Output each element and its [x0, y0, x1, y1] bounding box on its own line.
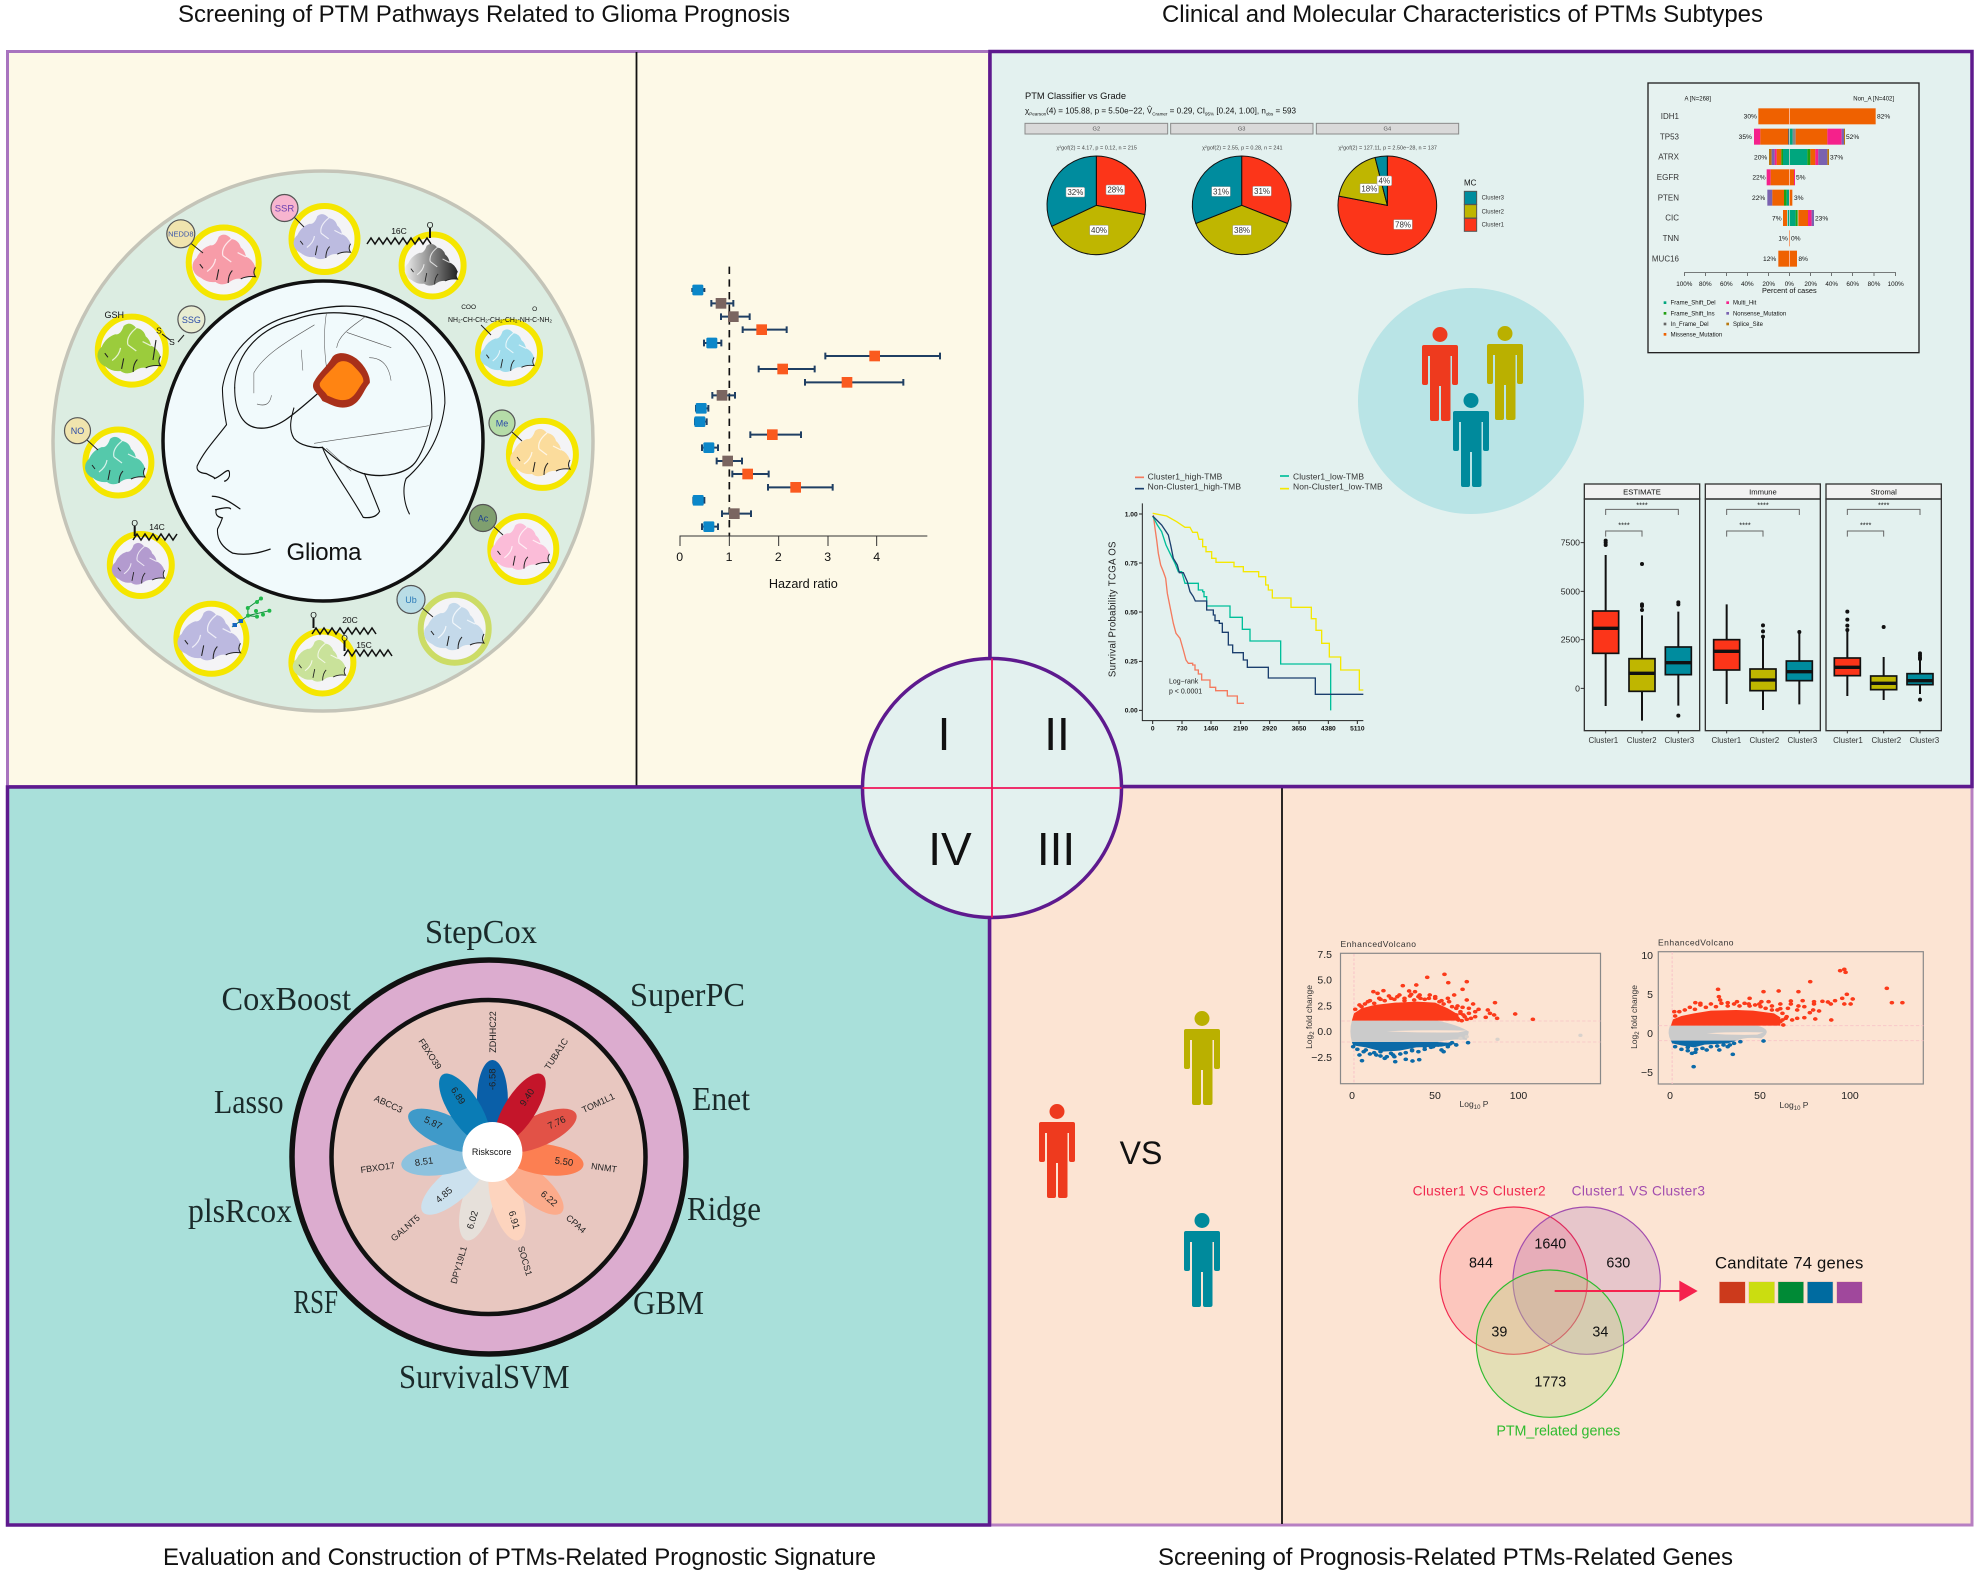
volcano plot: Cluster1 vs Cluster2: [1304, 939, 1601, 1111]
volcano plot: Cluster1 vs Cluster3: fold change: [1629, 985, 1639, 1031]
gene labels: MUC16: [1652, 254, 1680, 263]
facet: Stromal: Cluster2: [1871, 736, 1902, 745]
petal chart: risk score genes: 4.85: [434, 1185, 455, 1206]
panel IV: prognostic signature background: [8, 787, 990, 1525]
protein: methylation: Me: [496, 418, 508, 428]
percentage labels: 38%: [1234, 226, 1250, 235]
percent axis: Percent of cases: [1762, 286, 1817, 295]
oncoplot: mutation frequency comparison: [1648, 83, 1919, 353]
facet: Stromal: ****: [1878, 500, 1890, 509]
percentage values: 0%: [1791, 236, 1801, 243]
volcano plot: Cluster1 vs Cluster3: 10: [1641, 950, 1653, 962]
arrow to candidate genes: [1555, 1281, 1698, 1302]
algorithm labels: plsRcox: [188, 1193, 292, 1230]
outer ring disc: [53, 171, 593, 711]
legend: [1135, 472, 1383, 492]
survival curves: TCGA OS: 0.00: [1125, 708, 1138, 715]
facet: ESTIMATE: [1584, 484, 1700, 745]
volcano plot: Cluster1 vs Cluster3: −5: [1641, 1067, 1653, 1079]
mutation legend: Splice_Site: [1733, 322, 1764, 328]
volcano plot: Cluster1 vs Cluster2: 0: [1349, 1090, 1355, 1102]
protein: SSR: [271, 194, 358, 272]
facet: Immune: Cluster2: [1749, 736, 1780, 745]
petal chart: risk score genes: Riskscore: [472, 1147, 511, 1157]
pie charts: classifier vs grade: G3: [1238, 127, 1245, 133]
center circle: section numerals: [862, 658, 1122, 918]
volcano plot: Cluster1 vs Cluster2: 50: [1429, 1090, 1441, 1102]
protein: myristoylation 14C: O: [131, 518, 138, 528]
protein: palmitoylation 16C: [367, 220, 464, 296]
gene labels: CIC: [1665, 214, 1679, 223]
survival curves: TCGA OS: 0.75: [1125, 560, 1138, 567]
volcano plot: Cluster1 vs Cluster2: 10: [1474, 1105, 1481, 1111]
statistics line: obs: [1266, 111, 1274, 116]
inner disc: [332, 1000, 646, 1314]
facet: Immune: [1705, 484, 1820, 745]
survival curves: TCGA OS: 0.50: [1125, 609, 1138, 616]
protein: palmitoylation 16C: 16C: [391, 226, 407, 236]
venn diagram: candidate genes: Cluster1 VS Cluster3: [1572, 1184, 1705, 1199]
center circle: section numerals: III: [1037, 823, 1075, 875]
facet: Stromal: Cluster3: [1909, 736, 1940, 745]
panel I: PTM pathways background: [8, 52, 990, 786]
protein: nitrosylation: [64, 418, 151, 496]
protein: myristoylation 14C: 14C: [149, 522, 165, 532]
y axis: 2500: [1561, 635, 1580, 645]
algorithm labels: Ridge: [687, 1191, 761, 1228]
ring: algorithm band: [292, 960, 686, 1354]
legend: Cluster1_high-TMB: [1148, 472, 1223, 482]
percentage labels: 31%: [1254, 187, 1270, 196]
survival curves: TCGA OS: 730: [1176, 726, 1188, 733]
petal chart: risk score genes: 6.91: [506, 1210, 521, 1231]
gene labels: [1652, 112, 1680, 263]
volcano plot: Cluster1 vs Cluster2: EnhancedVolcano: [1340, 939, 1417, 949]
facet: Immune: Immune: [1749, 487, 1777, 496]
venn diagram: candidate genes: 1773: [1534, 1375, 1566, 1391]
title: panel I: Screening of PTM Pathways Related to Glioma Prognosis: [178, 1, 790, 28]
survival curves: TCGA OS: 5110: [1350, 726, 1365, 733]
center circle: head and brain: [163, 281, 483, 601]
reference line at HR 1: [727, 267, 732, 536]
statistics line: 95%: [1205, 111, 1214, 116]
protein: methylation: [489, 410, 576, 488]
percentage labels: 28%: [1107, 186, 1123, 195]
percent axis: [1676, 273, 1904, 295]
percent axis: 60%: [1720, 281, 1733, 288]
legend: Non-Cluster1_high-TMB: [1148, 482, 1241, 492]
volcano plot: Cluster1 vs Cluster3: 5: [1647, 989, 1653, 1001]
protein: citrullination: NH₂-CH-CH₂-CH₂-CH₂-NH-C-NH₂: [448, 315, 552, 324]
algorithm labels: SuperPC: [630, 977, 745, 1014]
percentage labels: 18%: [1361, 184, 1377, 193]
statistics line: (4) = 105.88, p = 5.50e−22, V̂: [1046, 105, 1153, 115]
gene labels: TP53: [1660, 132, 1680, 141]
volcano plot: Cluster1 vs Cluster3: 0: [1647, 1028, 1653, 1040]
petal chart: risk score genes: FBXO17: [360, 1160, 395, 1175]
gene labels: ATRX: [1658, 153, 1680, 162]
pie charts: classifier vs grade: G4: [1384, 127, 1391, 133]
center circle: section numerals: IV: [928, 823, 972, 875]
protein: acetylation: [470, 504, 556, 582]
protein: lipidation 20C 15C: [291, 610, 392, 694]
protein: citrullination: COO: [461, 304, 476, 311]
mutation legend: Frame_Shift_Del: [1671, 301, 1716, 307]
pie G2: [1047, 156, 1146, 255]
petal chart: risk score genes: 5.50: [554, 1155, 574, 1169]
facet: ESTIMATE: ****: [1636, 500, 1648, 509]
protein: citrullination: [448, 304, 552, 384]
protein: NEDD8: [167, 220, 259, 298]
gene labels: PTEN: [1658, 193, 1679, 202]
percentage values: 22%: [1752, 195, 1765, 202]
protein: glutathionylation: SSG: [182, 315, 201, 325]
petal chart: risk score genes: GALNT5: [389, 1213, 422, 1243]
algorithm labels: GBM: [633, 1285, 704, 1322]
protein: citrullination: O: [532, 306, 537, 313]
gene labels: IDH1: [1661, 112, 1680, 121]
mutation legend: [1664, 301, 1786, 338]
percentage labels: 32%: [1067, 188, 1083, 197]
forest plot: hazard ratios: 1: [726, 550, 733, 564]
heading: PTM Classifier vs Grade: [1025, 91, 1126, 101]
percentage values: 7%: [1772, 215, 1782, 222]
venn diagram: candidate genes: 39: [1491, 1324, 1507, 1340]
petal chart: risk score genes: NNMT: [590, 1161, 618, 1175]
percent axis: 80%: [1868, 281, 1881, 288]
y axis: 0: [1575, 683, 1580, 693]
percentage values: 5%: [1796, 175, 1806, 182]
y axis: 5000: [1561, 586, 1580, 596]
algorithm labels: [188, 914, 761, 1396]
facet: ESTIMATE: Cluster3: [1664, 736, 1695, 745]
petal chart: risk score genes: 9.40: [518, 1087, 537, 1108]
protein: glycosylation: [176, 596, 271, 674]
pie G4: [1338, 156, 1437, 255]
panel III: gene screening background: [990, 787, 1972, 1525]
algorithm labels: RSF: [294, 1284, 338, 1321]
petal chart: risk score genes: ZDHHC22: [488, 1011, 498, 1053]
box plots: ESTIMATE Immune Stromal: [1561, 484, 1941, 745]
panel II: subtype characteristics background: [990, 52, 1972, 786]
percentage values: 35%: [1739, 134, 1752, 141]
petal chart: risk score genes: SOCS1: [516, 1245, 534, 1277]
mutation legend: In_Frame_Del: [1671, 322, 1709, 328]
percent axis: 100%: [1676, 281, 1693, 288]
percent axis: 0%: [1785, 281, 1794, 288]
algorithm labels: SurvivalSVM: [399, 1359, 570, 1396]
legend: MC: Cluster2: [1482, 209, 1505, 215]
percent axis: 40%: [1741, 281, 1754, 288]
icon: red vs olive and teal patients: VS: [1120, 1135, 1162, 1171]
volcano plot: Cluster1 vs Cluster3: 10: [1794, 1106, 1801, 1112]
petal chart: risk score genes: [360, 1011, 618, 1285]
survival curves: TCGA OS: 1460: [1204, 726, 1219, 733]
forest plot: hazard ratios: [676, 267, 940, 591]
protein: glutathionylation: GSH: [105, 310, 124, 320]
percentage labels: 78%: [1395, 220, 1411, 229]
y axis: 7500: [1561, 538, 1580, 548]
petal chart: risk score genes: 6.89: [448, 1085, 467, 1107]
venn diagram: candidate genes: Cluster1 VS Cluster2: [1413, 1184, 1546, 1199]
oncoplot: mutation frequency comparison: A [N=268]: [1684, 97, 1711, 103]
volcano plot: Cluster1 vs Cluster2: 5.0: [1317, 974, 1332, 986]
icon: three patient subtypes on circle: [1358, 288, 1584, 514]
algorithm labels: StepCox: [425, 914, 537, 951]
statistics line: Cramer: [1152, 111, 1168, 116]
petal chart: risk score genes: 6.02: [465, 1210, 481, 1231]
percentage values: 20%: [1754, 154, 1767, 161]
facet: Immune: ****: [1757, 500, 1769, 509]
facet: ESTIMATE: Cluster2: [1627, 736, 1657, 745]
percentage values: 23%: [1815, 215, 1828, 222]
facet: Immune: Cluster1: [1711, 736, 1742, 745]
axis title: Hazard ratio: [769, 577, 838, 591]
venn diagram: candidate genes: 844: [1469, 1256, 1493, 1272]
facet: Stromal: ****: [1860, 520, 1872, 529]
survival curves: TCGA OS: 2920: [1262, 726, 1277, 733]
percentage values: [1739, 114, 1890, 263]
mutation legend: Frame_Shift_Ins: [1671, 311, 1715, 317]
percentage values: 30%: [1744, 114, 1757, 121]
venn diagram: candidate genes: PTM_related genes: [1496, 1424, 1620, 1440]
forest plot: hazard ratios: 0: [676, 550, 683, 564]
forest plot: hazard ratios: 2: [775, 550, 782, 564]
volcano plot: Cluster1 vs Cluster2: 2.5: [1317, 1000, 1332, 1012]
volcano plot: Cluster1 vs Cluster2: 100: [1510, 1090, 1527, 1102]
pie charts: classifier vs grade: χ²gof(2) = 2.55, p = 0.28, n = 241: [1202, 146, 1283, 152]
algorithm labels: CoxBoost: [222, 981, 352, 1018]
center circle: section numerals: II: [1044, 708, 1070, 760]
volcano plot: Cluster1 vs Cluster2: P: [1480, 1099, 1489, 1109]
icon: tumor: [313, 353, 370, 408]
facet: Stromal: [1826, 484, 1941, 745]
facet strips: [1025, 123, 1459, 134]
icon: red vs olive and teal patients: [1039, 1011, 1220, 1307]
gene labels: EGFR: [1657, 173, 1679, 182]
algorithm labels: Lasso: [214, 1084, 284, 1121]
survival lines: [1153, 513, 1363, 710]
facet: ESTIMATE: ESTIMATE: [1623, 487, 1661, 496]
forest plot: hazard ratios: 3: [824, 550, 831, 564]
percent axis: 20%: [1762, 281, 1775, 288]
protein: lipidation 20C 15C: 20C: [342, 615, 358, 625]
axes: [1139, 503, 1363, 724]
volcano plot: Cluster1 vs Cluster2: Log: [1304, 1035, 1314, 1049]
survival curves: TCGA OS: 1.00: [1125, 511, 1138, 518]
statistics line: [0.24, 1.00], n: [1214, 105, 1266, 115]
hazard ratio markers: [692, 285, 717, 532]
venn diagram: candidate genes: 1640: [1534, 1237, 1566, 1253]
protein: palmitoylation 16C: O: [427, 220, 434, 230]
pie G3: [1192, 156, 1291, 255]
legend: MC: [1464, 178, 1505, 231]
percent axis: 100%: [1888, 281, 1904, 288]
title: panel III: Screening of Prognosis-Related PTMs-Related Genes: [1158, 1544, 1733, 1571]
statistics line: = 593: [1273, 105, 1296, 115]
statistics line: = 0.29, CI: [1167, 105, 1205, 115]
pie charts: classifier vs grade: [1025, 91, 1505, 255]
facet: ESTIMATE: Cluster1: [1588, 736, 1619, 745]
survival curves: TCGA OS: [1108, 472, 1383, 733]
venn diagram: candidate genes: [1413, 1184, 1863, 1440]
volcano plot: Cluster1 vs Cluster2: fold change: [1304, 985, 1314, 1031]
petal chart: risk score genes: 6.22: [538, 1189, 559, 1209]
percent axis: 40%: [1825, 281, 1838, 288]
oncoplot: mutation frequency comparison: Non_A [N=402]: [1853, 97, 1894, 103]
volcano plot: Cluster1 vs Cluster3: P: [1800, 1100, 1809, 1110]
gene labels: TNN: [1663, 234, 1679, 243]
center circle: section numerals: I: [938, 708, 950, 760]
title: panel II: Clinical and Molecular Characteristics of PTMs Subtypes: [1162, 1, 1763, 28]
petal chart: risk score genes: 7.76: [546, 1114, 568, 1132]
legend: Cluster1_low-TMB: [1293, 472, 1364, 482]
volcano plot: Cluster1 vs Cluster3: EnhancedVolcano: [1658, 938, 1734, 948]
log-rank note: Log−rank: [1169, 679, 1199, 686]
volcano plot: Cluster1 vs Cluster3: 2: [1635, 1031, 1641, 1035]
legend: MC: Cluster3: [1482, 196, 1505, 202]
survival curves: TCGA OS: 2190: [1233, 726, 1248, 733]
venn diagram: candidate genes: 630: [1606, 1256, 1630, 1272]
pie charts: classifier vs grade: χ²gof(2) = 127.11, p = 2.50e−28, n = 137: [1338, 146, 1437, 152]
percentage values: 22%: [1752, 175, 1766, 182]
protein: ubiquitination: [397, 586, 489, 663]
protein: glutathionylation: S: [169, 337, 175, 347]
percent axis: 20%: [1804, 281, 1817, 288]
x axis: [680, 536, 927, 546]
percentage values: 3%: [1794, 195, 1804, 202]
percentage labels: 40%: [1091, 226, 1107, 235]
percentage values: 8%: [1798, 256, 1808, 263]
survival curves: TCGA OS: 4380: [1321, 726, 1336, 733]
pie charts: classifier vs grade: G2: [1093, 127, 1100, 133]
candidate gene swatches: [1719, 1282, 1862, 1303]
volcano plot: Cluster1 vs Cluster2: 0.0: [1317, 1026, 1332, 1038]
mutation legend: Nonsense_Mutation: [1733, 311, 1786, 317]
statistics line: Pearson: [1029, 111, 1047, 116]
survival curves: TCGA OS: 0: [1151, 726, 1155, 733]
forest plot: hazard ratios: 4: [873, 550, 880, 564]
facet: Immune: Cluster3: [1787, 736, 1818, 745]
machine-learning algorithms ring: [188, 914, 761, 1396]
facet: Stromal: Stromal: [1870, 487, 1897, 496]
confidence intervals: [692, 288, 940, 530]
stacked bars: [1754, 108, 1876, 267]
percentage values: 52%: [1846, 134, 1859, 141]
volcano plot: Cluster1 vs Cluster2: Log: [1460, 1099, 1474, 1109]
percentage values: 12%: [1763, 256, 1776, 263]
volcano plot: Cluster1 vs Cluster2: 7.5: [1317, 949, 1332, 961]
petal chart: risk score genes: 5.87: [422, 1115, 443, 1132]
label: Glioma: Glioma: [286, 539, 362, 566]
volcano plot: Cluster1 vs Cluster3: Log: [1780, 1100, 1794, 1110]
legend: Non-Cluster1_low-TMB: [1293, 482, 1383, 492]
survival curves: TCGA OS: 3650: [1292, 726, 1307, 733]
volcano plot: Cluster1 vs Cluster2: 2: [1310, 1031, 1316, 1035]
percent axis: 60%: [1846, 281, 1859, 288]
protein: acetylation: Ac: [478, 514, 489, 524]
volcano plot: Cluster1 vs Cluster2: −2.5: [1311, 1052, 1332, 1064]
facet: Immune: ****: [1739, 520, 1751, 529]
title: panel IV: Evaluation and Construction of PTMs-Related Prognostic Signature: [163, 1544, 876, 1571]
mutation legend: Multi_Hit: [1733, 301, 1757, 307]
protein: ubiquitination: Ub: [405, 595, 417, 605]
petal chart: risk score genes: CPA4: [564, 1213, 588, 1235]
petal chart: risk score genes: TOM1L1: [580, 1091, 616, 1115]
percentage values: 1%: [1778, 236, 1788, 243]
protein: NEDD8: NEDD8: [168, 230, 194, 238]
petal chart: risk score genes: TUBA1C: [543, 1036, 571, 1072]
legend: MC: MC: [1464, 178, 1477, 187]
protein: nitrosylation: NO: [71, 426, 84, 436]
protein: lipidation 20C 15C: O: [341, 633, 348, 643]
mutation legend: Missense_Mutation: [1671, 332, 1722, 338]
survival curves: TCGA OS: 0.25: [1125, 659, 1138, 666]
PTM wheel: glioma with modification ring: [53, 171, 593, 711]
percentage values: 82%: [1877, 114, 1890, 121]
percentage values: 37%: [1830, 154, 1843, 161]
protein: SSR: SSR: [275, 204, 294, 214]
candidate genes label: Canditate 74 genes: [1715, 1253, 1863, 1272]
survival curves: TCGA OS: Survival Probability TCGA OS: [1108, 541, 1119, 677]
statistics line: χ: [1025, 105, 1029, 115]
y axis: [1561, 538, 1580, 693]
legend: MC: Cluster1: [1482, 223, 1505, 229]
petal chart: risk score genes: DPY19L1: [449, 1245, 469, 1285]
volcano plot: Cluster1 vs Cluster3: 100: [1841, 1090, 1859, 1102]
petal chart: risk score genes: 8.51: [414, 1155, 434, 1169]
percentage labels: [1066, 176, 1412, 235]
algorithm labels: Enet: [692, 1081, 751, 1118]
volcano plot: Cluster1 vs Cluster3: 0: [1667, 1090, 1673, 1102]
protein: myristoylation 14C: [110, 518, 177, 596]
percentage labels: 4%: [1379, 177, 1390, 186]
p value note: p < 0.0001: [1169, 689, 1202, 696]
volcano plot: Cluster1 vs Cluster3: 50: [1754, 1090, 1766, 1102]
facet: ESTIMATE: ****: [1618, 520, 1630, 529]
petal chart: risk score genes: FBXO39: [416, 1037, 444, 1071]
volcano plot: Cluster1 vs Cluster3: [1629, 938, 1923, 1112]
venn diagram: candidate genes: 34: [1592, 1324, 1608, 1340]
pie charts: classifier vs grade: χ²gof(2) = 4.17, p = 0.12, n = 215: [1056, 146, 1137, 152]
facet: Stromal: Cluster1: [1833, 736, 1863, 745]
petal chart: risk score genes: ABCC3: [373, 1093, 404, 1115]
protein: glutathionylation: S: [156, 326, 162, 336]
volcano plot: Cluster1 vs Cluster3: Log: [1629, 1035, 1639, 1049]
protein: lipidation 20C 15C: O: [310, 610, 317, 620]
percent axis: 80%: [1699, 281, 1712, 288]
petal chart: risk score genes: -6.58: [487, 1068, 498, 1090]
protein: lipidation 20C 15C: 15C: [356, 640, 372, 650]
protein: glutathionylation: [97, 306, 205, 385]
percentage labels: 31%: [1213, 187, 1229, 196]
